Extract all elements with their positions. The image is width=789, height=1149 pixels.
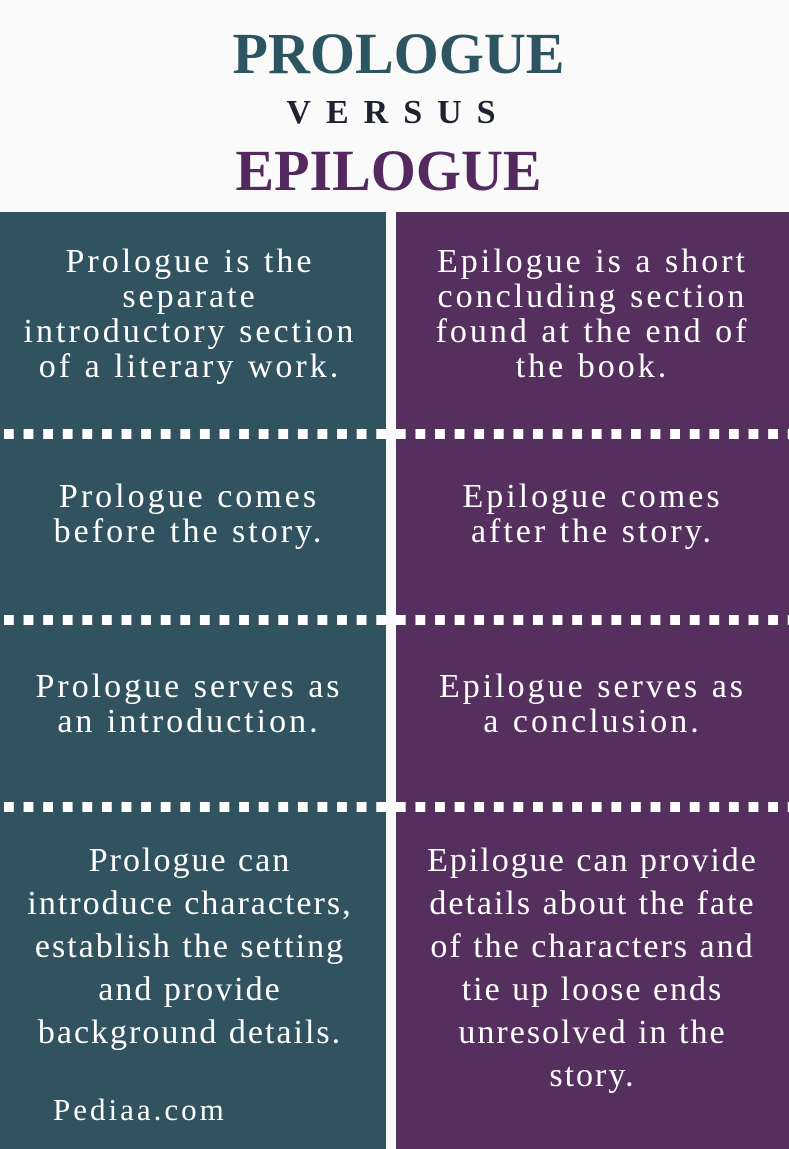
text: prologue content: background details. [38,1014,342,1051]
text: prologue content: introduce characters, [27,885,353,922]
text: prologue definition: Prologue is the [66,243,314,280]
text: epilogue content: Epilogue can provide [427,842,758,879]
text: epilogue content: of the characters and [430,928,755,965]
text: epilogue content: unresolved in the [458,1014,727,1051]
text: prologue function: an introduction. [57,703,321,740]
text: prologue definition [24,243,356,385]
text: epilogue function [439,668,746,740]
text: epilogue content: details about the fate [429,885,756,922]
text: epilogue content: tie up loose ends [462,971,723,1008]
text: epilogue position: Epilogue comes [462,478,723,515]
text: prologue position: Prologue comes [59,478,319,515]
title: prologue: PROLOGUE [233,21,564,86]
text: epilogue definition: the book. [516,348,669,385]
text: prologue content [27,842,353,1051]
text: prologue position [54,478,324,550]
panel: epilogue [396,212,789,1149]
text: epilogue function: a conclusion. [483,703,702,740]
text: epilogue function: Epilogue serves as [439,668,746,705]
text: prologue content: establish the setting [35,928,345,965]
text: epilogue content [427,842,758,1094]
text: epilogue position [462,478,723,550]
text: prologue definition: introductory section [24,313,356,350]
text: epilogue definition: Epilogue is a short [437,243,748,280]
title: epilogue: EPILOGUE [235,138,542,203]
text: prologue function: Prologue serves as [35,668,343,705]
text: epilogue definition: found at the end of [436,313,749,350]
text: epilogue content: story. [549,1057,636,1094]
text: prologue function [35,668,343,740]
text: prologue definition: separate [122,278,258,315]
text: epilogue definition [436,243,749,385]
text: prologue position: before the story. [54,513,324,550]
text: prologue content: and provide [98,971,282,1008]
text: prologue content: Prologue can [89,842,291,879]
text: prologue definition: of a literary work. [39,348,341,385]
text: epilogue definition: concluding section [438,278,747,315]
logo: pediaa: Pediaa.com [53,1092,227,1127]
title: versus: VERSUS [286,94,511,131]
panel: prologue [0,212,386,1149]
text: epilogue position: after the story. [471,513,714,550]
